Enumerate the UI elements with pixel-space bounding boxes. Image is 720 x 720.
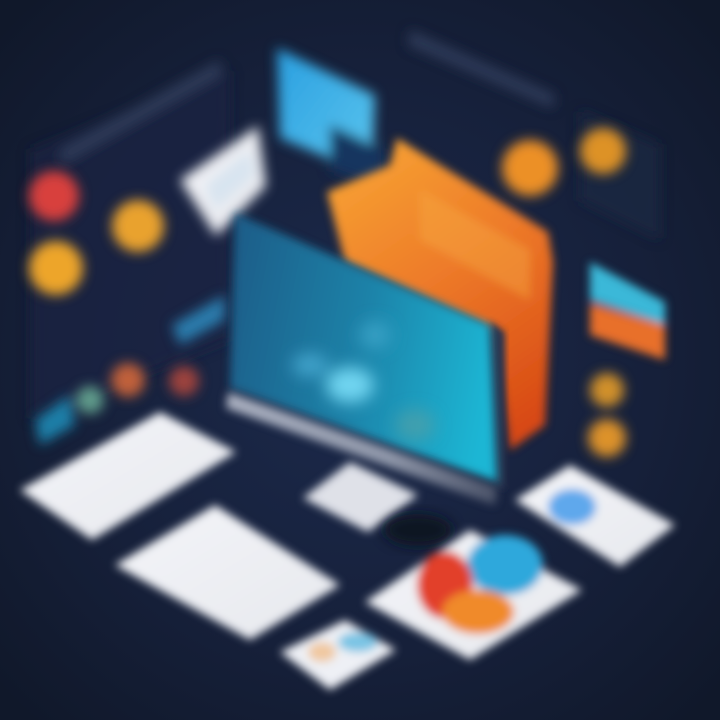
icon: yellow circle: [29, 241, 83, 295]
monitor stand: [303, 462, 418, 532]
monitor bezel: [226, 392, 497, 505]
dark cable: [384, 514, 452, 546]
pie slice: orange: [442, 590, 514, 634]
icon: small orange circle: [588, 419, 626, 457]
panel: white centre: [115, 505, 340, 640]
icon circles: [29, 128, 626, 457]
icon: red circle: [29, 171, 79, 221]
icon: amber circle: [112, 200, 164, 252]
panel: white left: [20, 412, 236, 540]
card: blue top: [277, 48, 385, 190]
small left chart: [35, 295, 225, 445]
panel: phone right: [515, 465, 675, 567]
faint background panels: [30, 30, 660, 420]
card: white tilted: [180, 126, 266, 236]
right card: teal and orange: [590, 262, 665, 360]
panel: pie chart: [365, 530, 582, 660]
screen details: [292, 321, 435, 441]
pie slice: blue: [467, 535, 543, 595]
monitor screen: [230, 213, 497, 482]
icon: small amber circle: [590, 373, 624, 407]
monitor: [226, 213, 505, 505]
monitor back edge: [490, 322, 505, 490]
icon: amber circle top right: [580, 128, 626, 174]
icon: orange circle top: [502, 140, 558, 196]
pie slice: red: [417, 551, 473, 619]
folder: orange: [327, 138, 553, 450]
panel: small bottom card: [280, 620, 396, 690]
